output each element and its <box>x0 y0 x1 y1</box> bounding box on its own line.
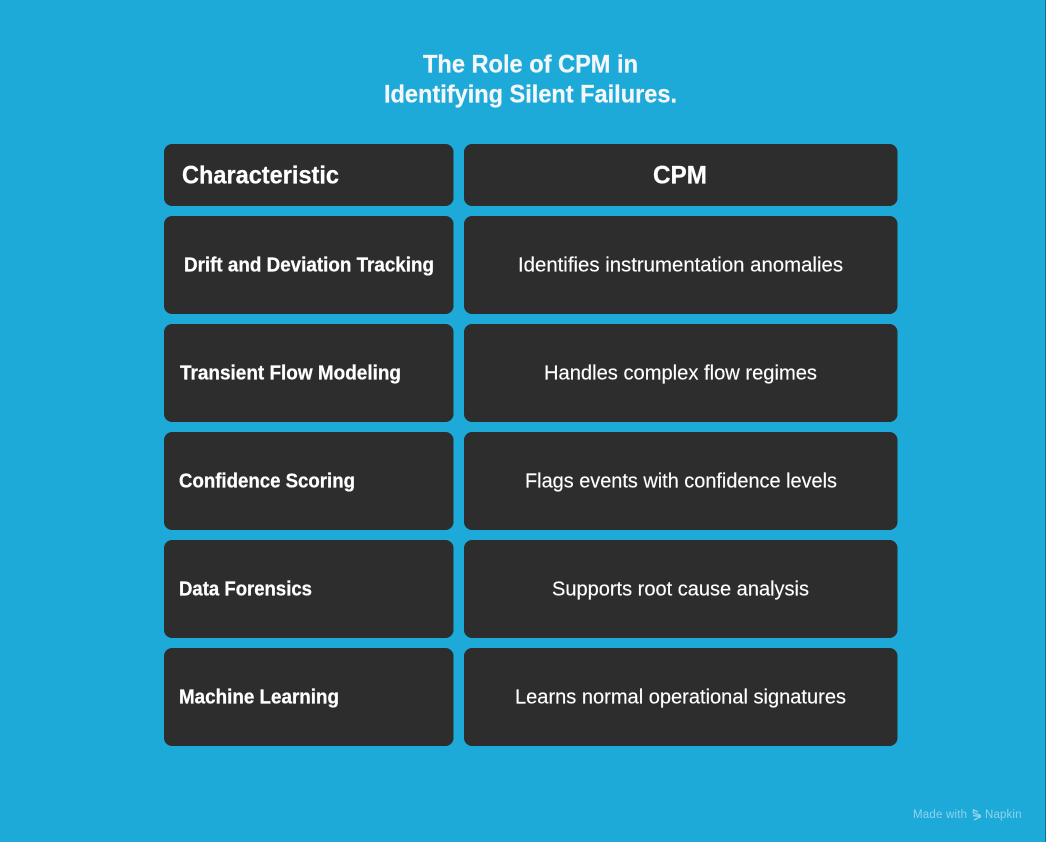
icon: Napkin logo <box>972 810 981 820</box>
row 5 CPM: Learns normal operational signatures <box>515 686 846 708</box>
row 3 characteristic: Confidence Scoring <box>179 470 355 492</box>
row 4 characteristic: Data Forensics <box>179 578 312 600</box>
row 5 CPM <box>464 648 898 746</box>
footer: Made with Napkin: Napkin <box>985 809 1022 821</box>
row 3 CPM: Flags events with confidence levels <box>525 470 837 492</box>
table <box>164 144 898 746</box>
footer: Made with Napkin: Made with <box>913 809 967 821</box>
row 2 CPM <box>464 324 898 422</box>
row 1 CPM: Identifies instrumentation anomalies <box>518 254 843 276</box>
row 2 characteristic <box>164 324 454 422</box>
header: Characteristic <box>164 144 454 206</box>
row 5 characteristic: Machine Learning <box>179 686 339 708</box>
row 1 characteristic: Drift and Deviation Tracking <box>184 254 434 276</box>
header: CPM: CPM <box>653 162 707 190</box>
footer: Made with Napkin <box>913 809 1022 821</box>
title: Identifying Silent Failures. <box>384 80 677 108</box>
row 1 characteristic <box>164 216 454 314</box>
title: The Role of CPM in <box>423 50 638 78</box>
row 2 CPM: Handles complex flow regimes <box>544 362 817 384</box>
row 4 CPM: Supports root cause analysis <box>552 578 809 600</box>
header: CPM <box>464 144 898 206</box>
row 3 characteristic <box>164 432 454 530</box>
row 5 characteristic <box>164 648 454 746</box>
header: Characteristic: Characteristic <box>182 162 339 190</box>
title <box>384 50 677 108</box>
row 4 characteristic <box>164 540 454 638</box>
row 1 CPM <box>464 216 898 314</box>
row 4 CPM <box>464 540 898 638</box>
row 3 CPM <box>464 432 898 530</box>
row 2 characteristic: Transient Flow Modeling <box>180 362 401 384</box>
